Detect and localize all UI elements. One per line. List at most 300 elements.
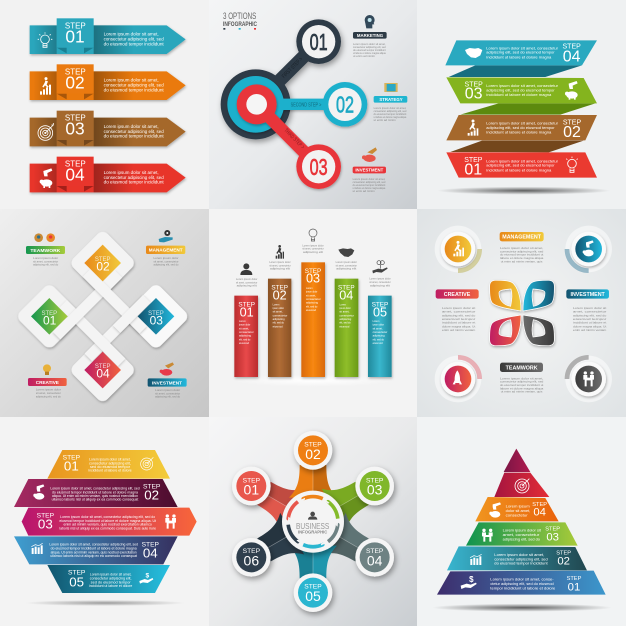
node: step 04: 04	[367, 552, 383, 568]
band: step 02: incididunt ut labore et dolore magna	[486, 130, 552, 135]
bar: step 03: sit amet,	[306, 293, 316, 297]
label: teamwork: adipiscing elit, sed do	[33, 263, 59, 267]
band: step 02: 02	[144, 488, 159, 503]
caption above bar 03: adipiscing elit	[303, 250, 323, 254]
icon: light bulb	[38, 32, 52, 47]
arrow row: step 02	[30, 64, 186, 100]
panel: pyramid	[417, 417, 626, 626]
arrow row: step 01: do eiusmod tempor incididunt	[104, 41, 165, 46]
label: investment: incididunt ut labore et	[573, 321, 607, 325]
label: management: do eiusmod tempor incididunt ut	[500, 253, 544, 257]
label: creative: Lorem ipsum dolor sit	[442, 306, 476, 310]
band: step 03: laboris nisi ut aliquip ex ea commodo consequat. Duis aute irure	[59, 526, 156, 530]
band: step 02	[14, 479, 178, 507]
panel: four petals	[417, 209, 626, 419]
icon: runner on bars	[453, 241, 464, 256]
diamond: step 03: 03	[150, 313, 163, 327]
band: step 04: incididunt ut labore et dolore magna	[486, 54, 552, 59]
node: step 05: 05	[305, 588, 321, 604]
label: teamwork: ut enim ad minim veniam, quis	[501, 390, 543, 394]
node: step 05: STEP	[304, 584, 322, 591]
step 01 disc: 01	[310, 29, 328, 55]
icon: bar chart	[31, 543, 43, 554]
label: teamwork: do eiusmod tempor incididunt ut	[500, 383, 544, 387]
arrow row: step 02: 02	[65, 72, 85, 92]
label: investment	[148, 378, 187, 399]
band: step 04: do eiusmod tempor incididunt ut labore et dolore magna	[51, 547, 137, 551]
arrow row: step 03: 03	[65, 119, 85, 139]
title	[223, 11, 257, 30]
ground shadow	[437, 187, 610, 195]
caption above bar 02	[269, 260, 291, 271]
icon: piggy bank	[489, 502, 501, 518]
label: investment: adipiscing elit, sed do	[155, 395, 181, 399]
tier: step 01: tempor incididunt ut labore et dolore	[490, 586, 556, 591]
diamond: step 03: STEP	[148, 311, 164, 317]
band: step 05: sed do eiusmod tempor	[91, 580, 132, 584]
icon: two people	[583, 371, 594, 386]
label: investment: ut labore et dolore magna aliqua	[353, 186, 386, 190]
tier: step 03: 03	[546, 531, 559, 543]
label: management: adipiscing elit, sed do	[153, 263, 179, 267]
arrow row: step 03: STEP	[65, 114, 86, 123]
icon: piggy bank	[583, 240, 594, 256]
diamond: step 01: 01	[43, 313, 57, 327]
tier: step 04: dolor sit amet,	[506, 508, 530, 513]
bar: step 04: STEP	[338, 285, 355, 292]
arrow row: step 02: do eiusmod tempor incididunt	[104, 87, 165, 92]
label: management: ut enim ad minim veniam, quis	[501, 259, 543, 263]
woven knot bands	[57, 273, 147, 362]
node: step 03: STEP	[366, 477, 384, 484]
arrow row: step 02: Lorem ipsum dolor sit amet,	[104, 78, 159, 83]
label: investment: ut enim ad minim	[353, 189, 375, 193]
band: step 02: Lorem ipsum dolor sit amet, consectetur adipiscing elit, sed	[50, 486, 140, 490]
diamond: step 01	[31, 298, 68, 335]
caption above bar 04: sit amet, consectetur	[336, 263, 357, 267]
circle badge: teamwork	[565, 356, 612, 402]
bar: step 01: adipiscing	[239, 334, 251, 338]
label: management: Lorem ipsum dolor sit amet,	[500, 246, 544, 250]
label: investment: enim ad minim veniam	[573, 328, 607, 332]
label: teamwork: TEAMWORK	[506, 365, 538, 371]
bar: step 01: consectetur	[239, 330, 254, 334]
bar: step 04: adipiscing	[339, 317, 352, 321]
label: marketing: consectetur adipiscing elit, sed	[353, 45, 386, 49]
bar: step 02: ipsum dolor	[273, 306, 284, 310]
caption above bar 02: Lorem ipsum dolor	[269, 260, 291, 264]
icon: target	[38, 123, 53, 140]
step 03 disc	[302, 150, 335, 183]
panel: step arrows	[0, 0, 210, 210]
bar: step 04: 04	[339, 289, 353, 303]
tier: step 02	[447, 546, 587, 570]
title: INFOGRAPHIC	[223, 21, 257, 28]
label: creative: amet, consectetur	[442, 310, 475, 314]
petal: dark	[523, 315, 554, 346]
hub diagram	[221, 19, 367, 189]
icon: book	[384, 83, 398, 92]
tier: step 03	[466, 522, 578, 546]
icon: two heads	[34, 233, 55, 242]
connector: step 06	[252, 513, 304, 571]
bar: step 01: STEP	[238, 301, 255, 308]
hub centre	[278, 487, 348, 557]
caption above bar 05	[369, 277, 391, 287]
bar: step 05: ipsum dolor	[373, 323, 384, 327]
bar: step 03: consectetur	[306, 297, 321, 301]
band: step 01: incididunt ut labore et dolore magna	[486, 167, 552, 172]
icon: runner on bars	[40, 77, 51, 95]
caption above bar 05: Lorem ipsum dolor	[369, 277, 391, 281]
node: step 02: STEP	[304, 442, 322, 449]
band: step 02: 02	[563, 124, 581, 141]
icon: head	[365, 15, 375, 28]
caption above bar 03	[302, 243, 324, 254]
connector: step 05	[289, 546, 337, 578]
bar: step 02: STEP	[271, 285, 288, 292]
band: step 01: Lorem ipsum dolor sit amet, consectetur	[486, 158, 559, 163]
band: step 04: 04	[143, 546, 158, 561]
node: step 01	[232, 467, 271, 505]
arrow row: step 01	[30, 18, 186, 54]
panel: diamond knot	[0, 209, 210, 419]
bar: step 03: elit, sed do	[306, 304, 318, 308]
panel: six-step hub	[209, 417, 419, 626]
fold: brown	[450, 141, 584, 152]
icon: hand with dollar: $	[145, 573, 149, 580]
tier: step 03: amet, consectetur	[503, 532, 540, 537]
icon: runner on bars	[276, 245, 284, 259]
bar: step 05: sit amet,	[373, 326, 383, 330]
label: marketing: Lorem ipsum dolor sit amet,	[353, 42, 386, 46]
bar: step 05	[368, 296, 392, 377]
label: creative: sit amet, consectetur	[36, 391, 61, 395]
caption above bar 01: Lorem ipsum dolor	[236, 277, 257, 281]
diamond: step 04	[84, 352, 121, 388]
label: creative: enim ad minim veniam	[442, 328, 476, 332]
band: step 02: STEP	[563, 119, 581, 126]
step 02 disc	[328, 88, 362, 121]
band: step 02	[446, 115, 597, 141]
band: step 03: 03	[38, 517, 53, 532]
icon: handshake	[338, 248, 354, 257]
band: step 02: do eiusmod tempor incididunt ut labore et dolore magna	[52, 490, 138, 494]
band: step 03: enim ad minim veniam, quis nostrud exercitation ullamco	[63, 523, 152, 527]
band: step 04	[14, 536, 178, 564]
ground shadow	[432, 604, 612, 612]
caption above bar 03: sit amet, consectetur	[302, 247, 324, 251]
bar: step 03: STEP	[305, 268, 321, 275]
bar: step 03: eiusmod	[306, 308, 316, 312]
band: step 01	[47, 450, 170, 479]
bar: step 03: ipsum dolor	[306, 290, 317, 294]
connector label: third step: THIRD STEP >	[283, 128, 306, 151]
white diamond tiles	[15, 229, 190, 404]
arrow row: step 04: Lorem ipsum dolor sit amet,	[104, 170, 159, 175]
band: step 02: STEP	[143, 484, 161, 491]
band: step 04: Lorem ipsum dolor sit amet, consectetur	[486, 45, 559, 50]
icon: bar chart	[470, 554, 482, 565]
bar: step 05: elit, sed do	[373, 337, 384, 341]
label: creative: dolore magna aliqua. Ut	[442, 324, 476, 328]
fold: green	[460, 103, 595, 115]
bar: step 01: eiusmod	[239, 341, 249, 345]
bar: step 01: sit amet,	[239, 326, 249, 330]
label: teamwork	[26, 246, 65, 267]
bar: step 02: elit, sed do	[273, 321, 284, 325]
label: investment: sit amet, consectetur	[155, 391, 180, 395]
band: step 01: STEP	[464, 157, 483, 164]
label: teamwork: consectetur adipiscing elit, sed	[500, 380, 544, 384]
band: step 03: STEP	[37, 513, 55, 520]
node: step 03: 03	[367, 482, 383, 498]
icon: light bulb	[566, 157, 578, 172]
label: creative: adipiscing elit, sed do	[36, 394, 61, 398]
tier: step 04	[475, 497, 559, 521]
circle badge: runner	[435, 226, 481, 272]
tier: apex	[504, 449, 530, 472]
panel: bar chart steps	[209, 209, 419, 419]
label: creative	[436, 289, 479, 332]
ground shadow	[25, 600, 185, 606]
label: investment	[566, 289, 609, 332]
bar: step 02: consectetur	[273, 313, 287, 317]
label: marketing	[353, 32, 387, 58]
label: investment: Lorem ipsum dolor	[155, 388, 180, 392]
tier: step 04: consectetur	[506, 512, 528, 517]
ground glow	[233, 375, 393, 387]
label: creative: adipiscing elit, sed do	[442, 313, 476, 317]
tier: target	[494, 473, 549, 497]
label: investment: adipiscing elit, sed do	[573, 313, 607, 317]
bar: step 04	[335, 279, 358, 377]
label: investment: amet, consectetur	[573, 310, 606, 314]
arrow row: step 03	[30, 111, 186, 146]
bar: step 03: Lorem	[306, 286, 313, 290]
panel: 3 options circles	[209, 0, 419, 210]
band: step 04: Lorem ipsum dolor sit amet, consectetur adipiscing elit, sed	[49, 543, 138, 547]
label: investment: INVESTMENT	[355, 168, 384, 173]
label: management: Lorem ipsum dolor	[153, 256, 179, 260]
bar: step 05: consectetur	[373, 330, 387, 334]
band: step 01: STEP	[63, 454, 81, 461]
band: step 01: adipiscing elit, sed do eiusmod tempor	[486, 163, 555, 168]
node: step 03	[355, 467, 394, 505]
connector: step 04	[322, 513, 374, 571]
caption above bar 01: adipiscing elit	[237, 284, 257, 288]
bar: step 03	[301, 262, 325, 377]
caption above bar 04: adipiscing elit	[336, 267, 357, 271]
petal: blue	[523, 280, 554, 311]
band: step 01	[446, 152, 597, 179]
arrow row: step 03: consectetur adipiscing elit, sed	[104, 129, 164, 134]
label: investment: do eiusmod tempor incididunt	[353, 183, 386, 187]
arrow row: step 04: do eiusmod tempor incididunt	[104, 180, 165, 185]
connector label: first step: FIRST STEP >	[281, 56, 305, 80]
icon: rocket	[453, 370, 462, 384]
band: step 04: STEP	[142, 541, 160, 548]
bar: step 05: adipiscing	[373, 334, 385, 338]
hub centre: INFOGRAPHIC	[298, 530, 328, 535]
arrow row: step 01: STEP	[65, 21, 86, 30]
bar: step 04: Lorem	[339, 302, 346, 306]
node: step 05	[294, 573, 332, 612]
tier: step 01: ctetur adipiscing elit, sed do eiusmod	[490, 581, 554, 586]
arrow row: step 01: Lorem ipsum dolor sit amet,	[104, 32, 159, 37]
title: 3 OPTIONS	[223, 11, 256, 21]
band: step 03: Lorem ipsum dolor sit amet, consectetur adipiscing elit, sed do	[60, 515, 155, 519]
label: marketing: ut labore et dolore magna aliqua	[353, 51, 386, 55]
circle badge: piggy	[565, 226, 612, 272]
arrow row: step 04: 04	[65, 165, 85, 185]
bar: step 02: Lorem	[273, 302, 280, 306]
node: step 02: 02	[305, 446, 321, 462]
label: strategy: consectetur adipiscing elit, sed	[374, 109, 407, 113]
band: step 02: aliqua. Ut enim ad minim veniam, quis nostrud exercitation	[52, 494, 138, 498]
node: step 04: STEP	[366, 548, 384, 555]
caption above bar 05: adipiscing elit	[370, 283, 390, 287]
label: creative: CREATIVE	[444, 292, 471, 298]
node: step 06: STEP	[243, 548, 261, 555]
caption above bar 01: sit amet, consectetur	[236, 280, 257, 284]
label: creative: Lorem ipsum dolor	[36, 388, 61, 392]
icon: hand with dollar	[461, 575, 477, 589]
bar: step 04: consectetur	[339, 313, 354, 317]
icon: two people	[165, 514, 176, 529]
bar: step 02: eiusmod	[273, 324, 283, 328]
bar: step 01: elit, sed do	[239, 337, 251, 341]
icon: target	[141, 457, 153, 470]
band: step 05: consectetur adipiscing elit,	[90, 577, 132, 581]
petals	[490, 280, 554, 346]
tier: step 03: Lorem ipsum dolor sit	[503, 528, 542, 533]
label: investment: Lorem ipsum dolor sit	[573, 306, 607, 310]
band: step 03: 03	[465, 86, 483, 103]
caption above bar 02: sit amet, consectetur	[269, 263, 291, 267]
tier: step 01: STEP	[567, 576, 582, 582]
label: creative: incididunt ut labore et	[442, 321, 476, 325]
bar: step 05: Lorem	[373, 319, 380, 323]
band: step 02: Lorem ipsum dolor sit amet, consectetur	[486, 121, 559, 126]
label: creative	[28, 378, 67, 398]
diamond: step 02: STEP	[95, 257, 110, 263]
diamond: step 04: 04	[96, 366, 110, 380]
band: step 03	[446, 77, 597, 103]
label: creative: CREATIVE	[36, 380, 59, 385]
petal: crimson	[490, 315, 521, 346]
diamond: step 01: STEP	[42, 311, 57, 317]
arrow row: step 03: do eiusmod tempor incididunt	[104, 134, 165, 139]
band: step 01: 01	[64, 458, 79, 473]
petal: orange	[490, 280, 521, 311]
band: step 04: adipiscing elit, sed do eiusmod tempor	[486, 50, 555, 55]
bar: step 02: sit amet,	[273, 310, 283, 314]
label: strategy: do eiusmod tempor incididunt	[374, 112, 407, 116]
label: investment: INVESTMENT	[570, 292, 606, 298]
fold: teal	[449, 65, 582, 77]
label: management: MANAGEMENT	[502, 235, 542, 241]
icon: hand and gear	[159, 230, 173, 242]
tier: step 02: 02	[557, 556, 570, 568]
label: marketing: ut enim ad minim	[353, 54, 376, 58]
tier: step 01	[437, 571, 606, 595]
label: management	[500, 232, 544, 263]
label: teamwork: sit amet, consectetur	[33, 259, 58, 263]
label: strategy: ut enim ad minim	[374, 118, 396, 122]
label: marketing: do eiusmod tempor incididunt	[353, 48, 386, 52]
icon: target	[515, 479, 529, 493]
label: management	[146, 246, 185, 267]
bar: step 04: eiusmod	[339, 324, 350, 328]
node: step 02	[294, 431, 332, 470]
band: step 02: adipiscing elit, sed do eiusmod tempor	[486, 125, 555, 130]
band: step 02: ullamco laboris nisi ut aliquip ex ea commodo consequat	[52, 498, 138, 502]
tier: step 04: STEP	[532, 502, 547, 508]
band: step 05: 05	[69, 574, 84, 589]
caption above bar 05: sit amet, consectetur	[369, 280, 391, 284]
icon: light bulb	[309, 229, 317, 241]
label: strategy: ut labore et dolore magna aliqua	[374, 115, 407, 119]
connector: step 02	[289, 465, 337, 498]
bar: step 01: Lorem	[239, 319, 246, 323]
band: step 04: STEP	[563, 44, 581, 51]
bar: step 05: 05	[373, 305, 387, 319]
arrow row: step 01: 01	[65, 26, 85, 46]
caption above bar 04: Lorem ipsum dolor	[336, 260, 357, 264]
arrow row: step 04: STEP	[65, 160, 86, 169]
band: step 04: aliqua. Ut enim ad minim veniam, quis nostrud exercitation	[51, 550, 137, 554]
bar: step 01: ipsum dolor	[239, 323, 250, 327]
label: management: sit amet, consectetur	[153, 259, 179, 263]
caption above bar 01	[236, 277, 257, 288]
label: teamwork	[500, 363, 544, 394]
label: management: labore et dolore magna aliqua	[500, 256, 544, 260]
band: step 03: eiusmod tempor incididunt ut labore et dolore magna aliqua. Ut	[59, 519, 156, 523]
tier: step 04: 04	[533, 507, 546, 519]
icon: piggy and coin	[362, 147, 377, 162]
bar: step 04: sit amet,	[339, 310, 349, 314]
node: step 04	[355, 538, 394, 577]
icon: business person	[240, 263, 252, 275]
label: strategy: Lorem ipsum dolor sit amet,	[374, 106, 407, 110]
band: step 04	[445, 40, 597, 65]
tier: step 02: do eiusmod tempor incididunt	[494, 561, 549, 566]
band: step 05: incididunt ut labore et dolore	[89, 584, 132, 588]
arrow row: step 01: consectetur adipiscing elit, sed	[104, 37, 164, 42]
panel: hexagon bands	[0, 417, 210, 626]
arrow row: step 04	[30, 157, 186, 192]
icon: runner on bars	[468, 119, 478, 136]
caption above bar 02: adipiscing elit	[270, 267, 290, 271]
label: creative: eiusmod tempor	[442, 317, 475, 321]
label: management: MANAGEMENT	[149, 248, 183, 253]
band: step 03	[22, 508, 197, 536]
node: step 06: 06	[244, 552, 259, 568]
bar: step 02: 02	[273, 289, 287, 303]
label: strategy	[374, 96, 407, 122]
label: teamwork: Lorem ipsum dolor	[33, 256, 58, 260]
band: step 05: Lorem ipsum dolor sit amet,	[90, 573, 132, 577]
step 01 disc	[302, 25, 335, 58]
icon: person	[308, 512, 317, 520]
connector: step 01	[252, 473, 304, 530]
circle badge: rocket	[435, 356, 481, 402]
step 03 disc: 03	[310, 154, 328, 180]
bar: step 04: ipsum dolor	[339, 306, 351, 310]
band: step 05	[47, 565, 170, 593]
label: investment: INVESTMENT	[152, 380, 182, 385]
